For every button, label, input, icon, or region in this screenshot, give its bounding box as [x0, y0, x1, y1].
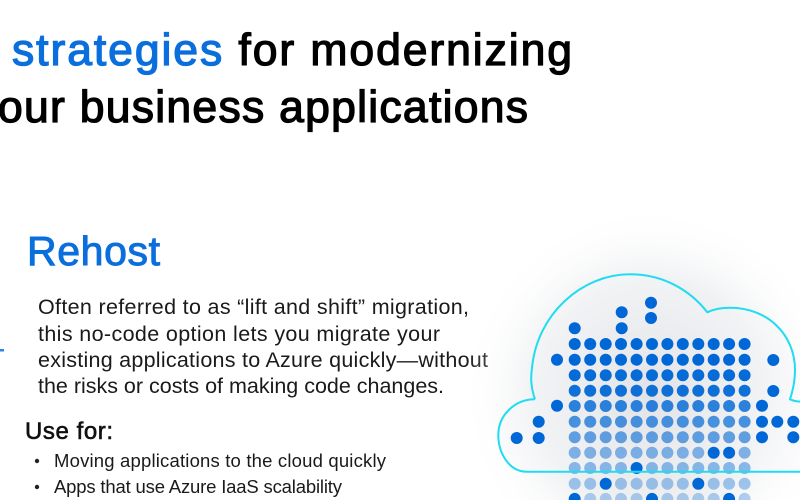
bullet 2: Apps that use Azure IaaS scalability — [54, 476, 343, 497]
row 5 — [569, 400, 751, 412]
heading: Rehost: Rehost — [27, 228, 161, 274]
title — [0, 26, 572, 132]
left edge accent mark — [0, 349, 4, 352]
row 7 — [569, 431, 751, 443]
row 4 — [569, 385, 751, 397]
bullet list — [35, 450, 387, 497]
dot grid — [569, 338, 751, 500]
soft glow behind cloud — [460, 205, 800, 500]
description line 2: this no-code option lets you migrate your — [38, 322, 440, 346]
row 1 — [569, 338, 751, 350]
description line 1: Often referred to as “lift and shift” migration, — [38, 295, 469, 319]
description line 3: existing applications to Azure quickly—without — [38, 348, 488, 372]
title line 1: strategies for modernizing — [12, 26, 572, 75]
cloud fill — [498, 274, 800, 472]
cloud outline — [498, 274, 800, 472]
description line 4: the risks or costs of making code changes. — [38, 374, 444, 398]
title line 2: our business applications — [0, 83, 528, 132]
row 8 — [569, 447, 751, 459]
solid accent dots — [511, 297, 799, 500]
description paragraph — [38, 295, 488, 398]
icon: cloud of data dots — [498, 274, 800, 500]
row 6 — [569, 416, 751, 428]
row 10 — [569, 478, 751, 490]
row 2 — [569, 354, 751, 366]
subheading: Use for: Use for: — [25, 418, 113, 445]
bullet 1: Moving applications to the cloud quickly — [54, 450, 387, 471]
row 11, cut off by the bottom edge — [584, 493, 751, 500]
row 9 — [569, 462, 751, 474]
row 3 — [569, 369, 751, 381]
